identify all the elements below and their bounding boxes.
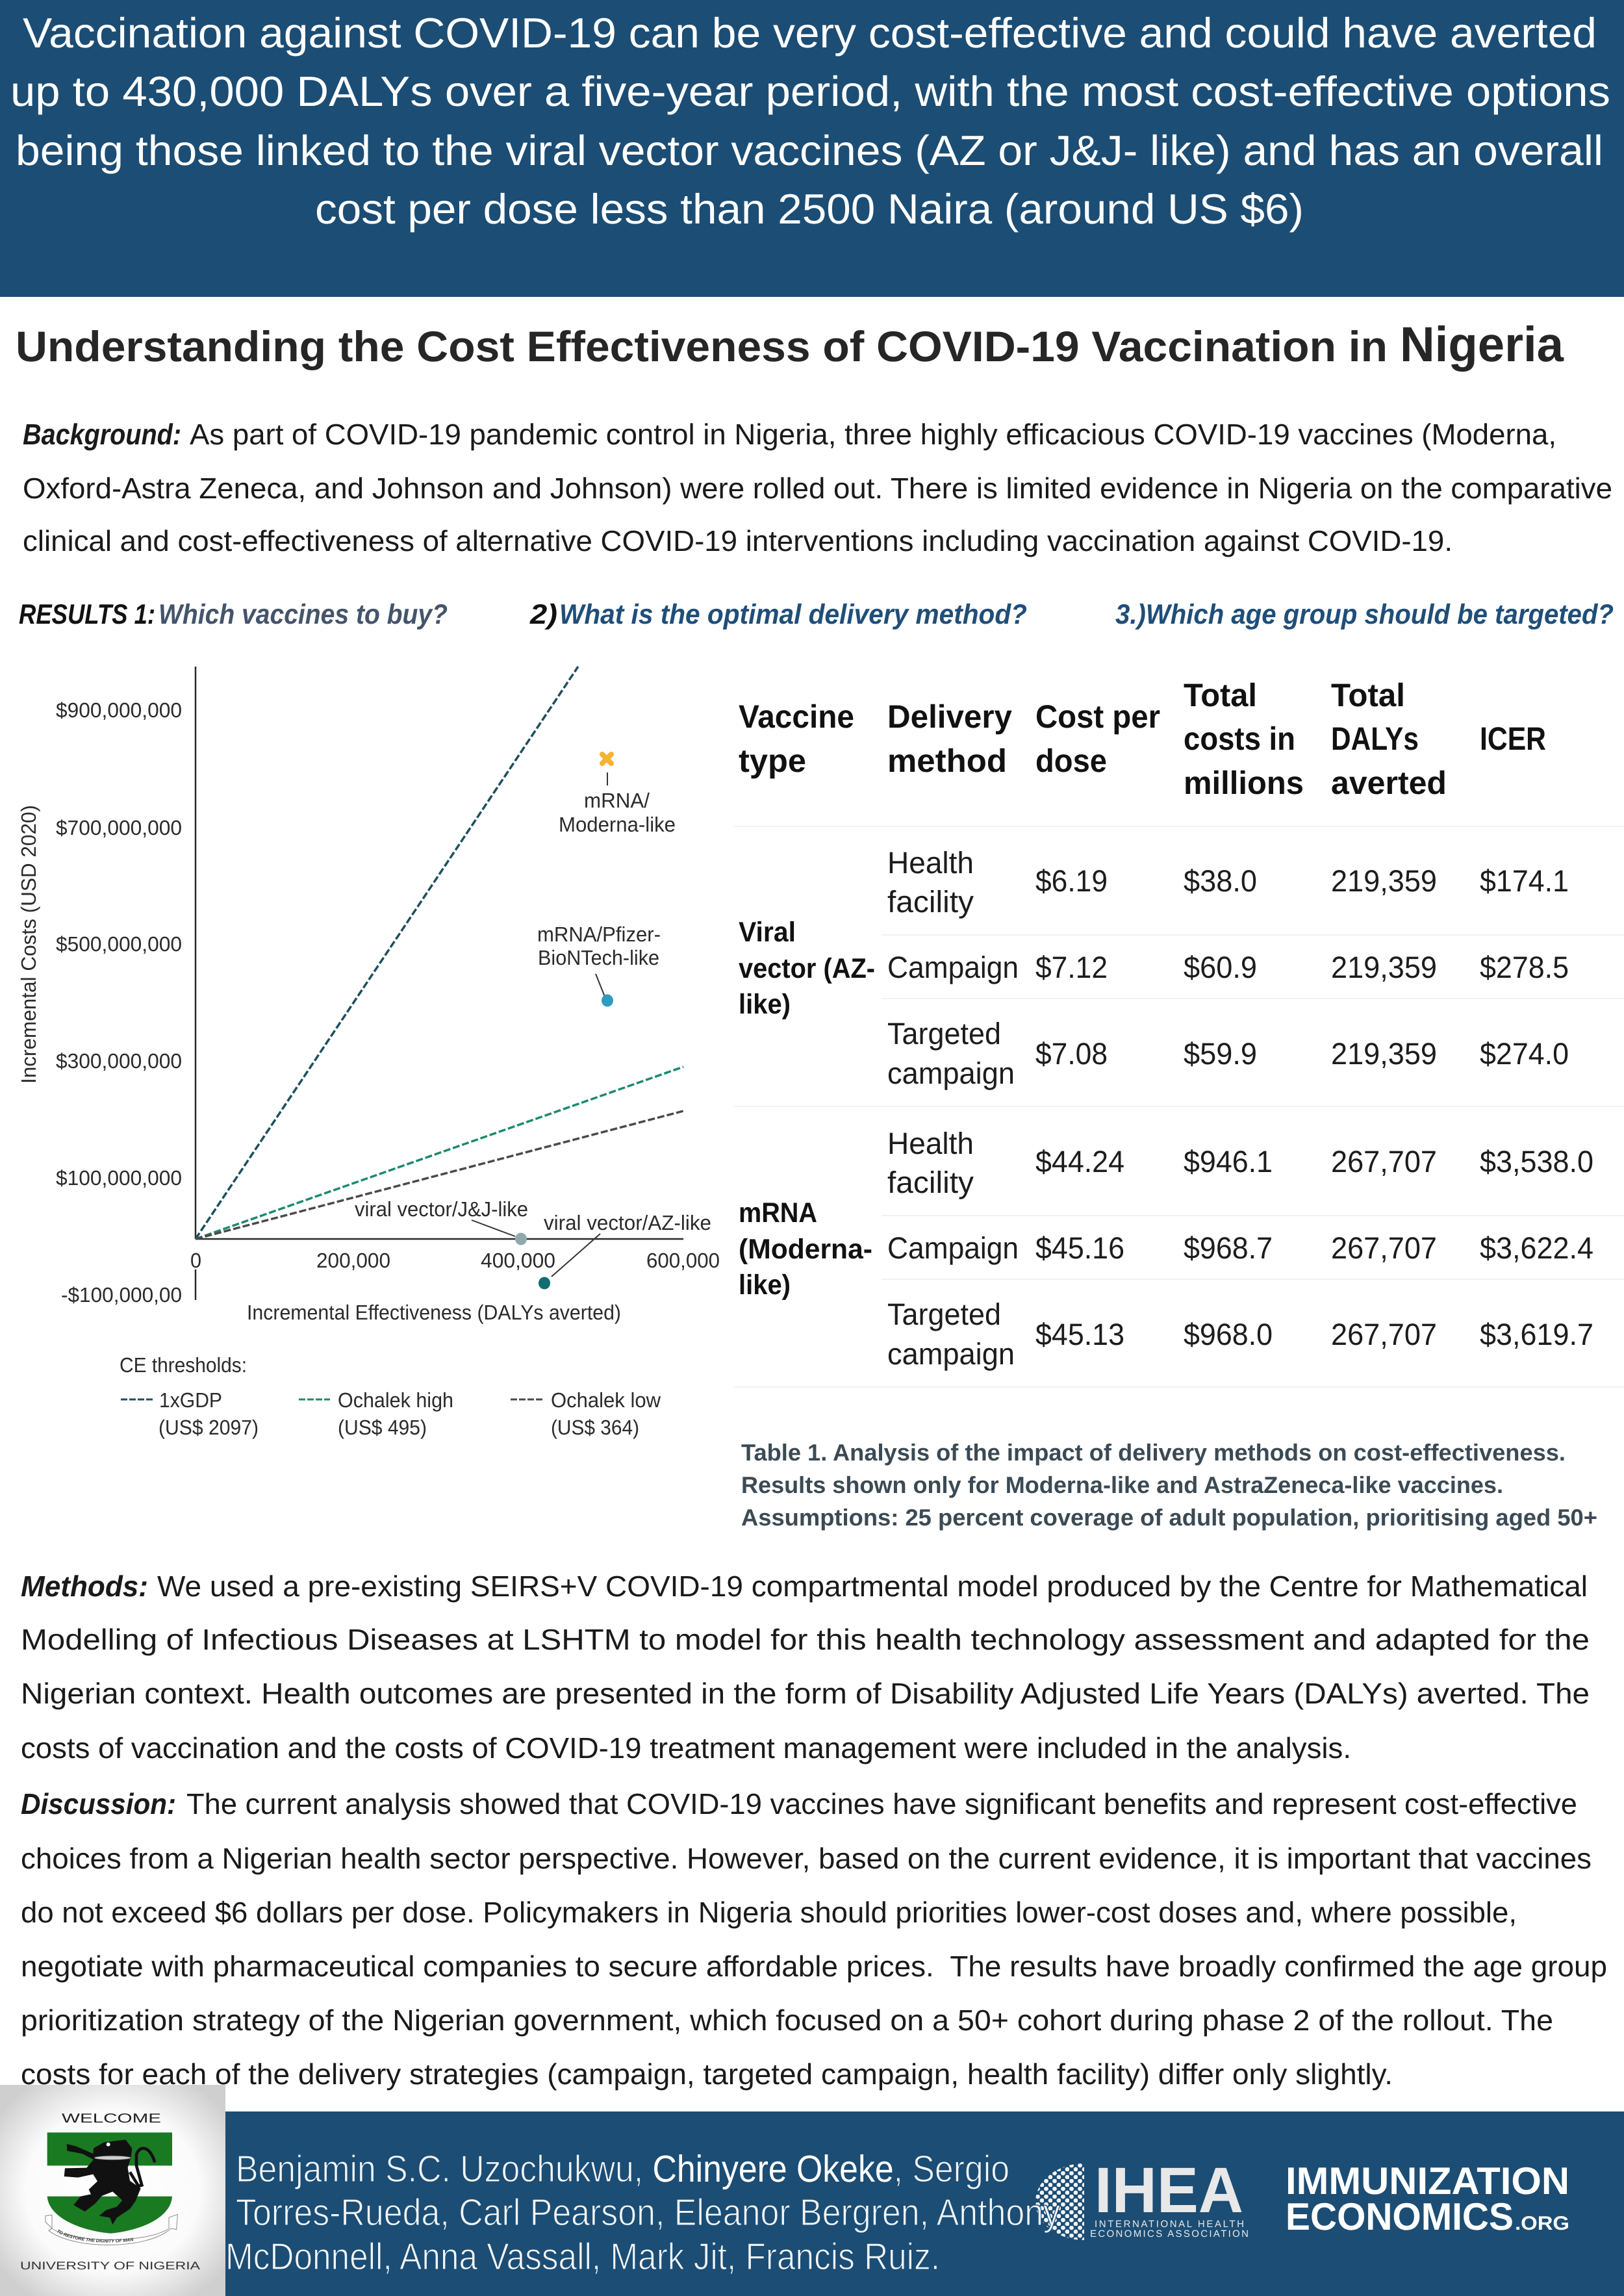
row: mRNA, health facility: 267,707 [1331,1144,1437,1179]
table header row: DALYs [1331,721,1419,757]
point: viral vector/AZ-like [539,1211,711,1289]
row: viral vector, targeted campaign: campaign [887,1056,1015,1090]
point: mRNA/Moderna-like: Moderna-like [559,813,676,836]
methods text block [21,1570,1590,1765]
point: mRNA/Pfizer-BioNTech-like: mRNA/Pfizer- [537,923,661,946]
table header row: type [739,743,806,779]
y axis tick labels: $300,000,000 [56,1049,182,1073]
point: mRNA/Moderna-like: mRNA/ [584,789,650,812]
row: viral vector, health facility: facility [887,884,974,919]
header banner: key message: Vaccination against COVID-19 can be very cost-effective and could have averted [23,9,1597,57]
row: viral vector, targeted campaign: 219,359 [1331,1036,1437,1071]
row: viral vector, campaign: $278.5 [1480,950,1569,984]
row: mRNA, campaign: $968.7 [1184,1231,1273,1265]
point: mRNA/Pfizer-BioNTech-like: BioNTech-like [538,946,659,969]
row: viral vector, health facility: $6.19 [1035,863,1108,898]
discussion text block [21,1787,1607,2091]
table caption [741,1439,1597,1531]
authors [225,2148,1060,2278]
icon: IHEA logo: INTERNATIONAL HEALTH [1095,2219,1244,2230]
legend: CE thresholds: (US$ 364) [551,1416,639,1439]
table header row: Delivery [887,698,1012,735]
row: mRNA, health facility: $946.1 [1184,1144,1273,1179]
row: viral vector, targeted campaign: $59.9 [1184,1036,1257,1071]
table caption: Table 1. Analysis of the impact of delivery methods on cost-effectiveness. [741,1439,1566,1466]
background text block: clinical and cost-effectiveness of alternative COVID-19 interventions including vaccination against COVID-19. [23,524,1453,557]
table header row: Total [1184,677,1257,713]
y axis tick labels: $100,000,000 [56,1166,182,1190]
row: mRNA, targeted campaign: $45.13 [1035,1317,1124,1351]
vaccine type: mRNA: (Moderna- [739,1234,872,1265]
methods text block: costs of vaccination and the costs of COVID-19 treatment management were included in the analysis. [21,1731,1351,1765]
legend: CE thresholds: Ochalek low [551,1388,661,1412]
vaccine type: viral vector: like) [739,989,791,1020]
legend: CE thresholds [120,1353,661,1439]
x axis tick labels: 400,000 [481,1249,555,1272]
methods text block: Nigerian context. Health outcomes are presented in the form of Disability Adjusted Life Years (DALYs) averted. The [21,1677,1590,1710]
table header row: Cost per [1035,698,1160,735]
x axis tick labels: 0 [190,1249,201,1272]
table header row: ICER [1480,721,1546,757]
row: mRNA, targeted campaign: campaign [887,1336,1015,1371]
point: viral vector/AZ-like: viral vector/AZ-like [544,1211,711,1234]
y axis [195,667,196,1300]
icon: immunizationeconomics.org logo: IMMUNIZATION [1286,2160,1569,2202]
discussion text block: costs for each of the delivery strategies (campaign, targeted campaign, health facility) differ only slightly. [21,2058,1393,2091]
icon: immunizationeconomics.org logo: .ORG [1515,2213,1569,2234]
row: mRNA, campaign: $3,622.4 [1480,1231,1593,1265]
authors: Torres-Rueda, Carl Pearson, Eleanor Bergren, Anthony [236,2191,1060,2234]
icon: IHEA logo: IHEA [1095,2154,1243,2226]
table caption: Results shown only for Moderna-like and AstraZeneca-like vaccines. [741,1472,1503,1498]
results headings: 2) [529,599,557,630]
legend: CE thresholds: (US$ 495) [338,1416,427,1439]
background text block: As part of COVID-19 pandemic control in Nigeria, three highly efficacious COVID-19 vaccines (Moderna, [190,418,1556,451]
row: viral vector, health facility [887,845,1569,919]
row: viral vector, health facility: 219,359 [1331,863,1437,898]
row: viral vector, campaign: $60.9 [1184,950,1257,984]
legend: CE thresholds: (US$ 2097) [159,1416,259,1439]
row: viral vector, campaign: $7.12 [1035,950,1108,984]
table header row: averted [1331,765,1447,801]
black lion [64,2139,155,2225]
y axis title: Incremental Costs (USD 2020) [17,805,40,1084]
row: viral vector, health facility: $38.0 [1184,863,1257,898]
x axis tick labels [190,1249,720,1272]
icon: University of Nigeria crest: WELCOME [62,2111,161,2126]
row: viral vector, targeted campaign: $7.08 [1035,1036,1108,1071]
point: mRNA/Pfizer-BioNTech-like [537,923,661,1007]
vaccine type: viral vector: vector (AZ- [739,953,875,984]
row: viral vector, campaign [887,950,1569,984]
table header row: Vaccine [739,698,854,735]
table rules [735,826,1624,1387]
y axis tick labels [56,698,182,1307]
row: mRNA, targeted campaign: Targeted [887,1297,1001,1331]
row: viral vector, targeted campaign [887,1016,1569,1090]
row: mRNA, campaign: 267,707 [1331,1231,1437,1265]
legend: CE thresholds: CE thresholds: [120,1353,247,1377]
row: mRNA, campaign: $45.16 [1035,1231,1124,1265]
methods text block: We used a pre-existing SEIRS+V COVID-19 compartmental model produced by the Centre for Mathematical [157,1570,1588,1603]
background text block: Oxford-Astra Zeneca, and Johnson and Johnson) were rolled out. There is limited evidence in Nigeria on the comparative [23,472,1612,505]
title: Nigeria [1400,317,1564,372]
x axis [196,1238,683,1240]
x axis title: Incremental Effectiveness (DALYs averted) [247,1301,621,1324]
table header row: Total [1331,677,1405,713]
row: mRNA, targeted campaign: $968.0 [1184,1317,1273,1351]
authors: McDonnell, Anna Vassall, Mark Jit, Francis Ruiz. [225,2236,940,2278]
y axis tick labels: $500,000,000 [56,932,182,956]
threshold line: Ochalek low [196,1111,683,1239]
threshold line: 1xGDP [196,667,578,1239]
row: mRNA, targeted campaign: 267,707 [1331,1317,1437,1351]
row: mRNA, targeted campaign: $3,619.7 [1480,1317,1593,1351]
discussion text block: negotiate with pharmaceutical companies to secure affordable prices. The results have broadly confirmed the age group [21,1950,1607,1983]
results headings: RESULTS 1: [19,599,155,630]
authors: Benjamin S.C. Uzochukwu, Chinyere Okeke, Sergio [236,2148,1009,2190]
icon: University of Nigeria crest: UNIVERSITY OF NIGERIA [20,2260,201,2272]
header banner: key message: up to 430,000 DALYs over a five-year period, with the most cost-effective options [10,68,1610,115]
icon: immunizationeconomics.org logo: ECONOMICS [1286,2195,1514,2238]
row: viral vector, health facility: Health [887,845,974,880]
scroll with motto [45,2214,178,2245]
x axis tick labels: 200,000 [316,1249,390,1272]
row: mRNA, health facility [887,1126,1593,1199]
title: Understanding the Cost Effectiveness of COVID-19 Vaccination in [16,322,1388,370]
icon: halftone globe [1035,2163,1084,2240]
icon: immunizationeconomics.org logo [1286,2160,1569,2238]
x axis tick labels: 600,000 [646,1249,720,1272]
header banner: key message [0,0,1624,297]
discussion text block: choices from a Nigerian health sector perspective. However, based on the current evidence, it is important that vaccines [21,1842,1592,1875]
point: viral vector/J&J-like [355,1197,528,1245]
vaccine type: mRNA [739,1197,872,1301]
y axis tick labels: $700,000,000 [56,816,182,839]
discussion text block: do not exceed $6 dollars per dose. Policymakers in Nigeria should priorities lower-cost doses and, where possible, [21,1896,1517,1929]
scroll with motto: TO RESTORE THE DIGNITY OF MAN [57,2230,133,2243]
row: viral vector, campaign: 219,359 [1331,950,1437,984]
vaccine type: viral vector: Viral [739,917,796,948]
row: viral vector, health facility: $174.1 [1480,863,1569,898]
row: mRNA, health facility: Health [887,1126,974,1160]
vaccine type: viral vector [739,917,875,1020]
row: mRNA, health facility: $3,538.0 [1480,1144,1593,1179]
results headings: Which vaccines to buy? [159,599,448,630]
table caption: Assumptions: 25 percent coverage of adult population, prioritising aged 50+ [741,1504,1597,1531]
table header row [739,677,1546,801]
header banner: key message: cost per dose less than 2500 Naira (around US $6) [315,185,1304,233]
vaccine type: mRNA: like) [739,1269,791,1301]
discussion text block: The current analysis showed that COVID-19 vaccines have significant benefits and represent cost-effective [186,1787,1577,1820]
table header row: millions [1184,765,1304,801]
table header row: dose [1035,743,1107,779]
vaccine type: mRNA: mRNA [739,1197,817,1229]
methods text block: Modelling of Infectious Diseases at LSHTM to model for this health technology assessment and adapted for the [21,1623,1590,1656]
y axis tick labels: -$100,000,00 [61,1283,182,1307]
row: mRNA, campaign [887,1231,1593,1265]
point: viral vector/J&J-like: viral vector/J&J-like [355,1197,528,1221]
icon: IHEA logo: ECONOMICS ASSOCIATION [1090,2228,1249,2239]
threshold line: Ochalek high [196,1067,683,1239]
table header row: costs in [1184,721,1295,757]
legend: CE thresholds: Ochalek high [338,1388,453,1412]
table header row: method [887,743,1007,779]
point: mRNA/Moderna-like [559,754,676,836]
background text block [23,418,1612,557]
row: viral vector, targeted campaign: Targeted [887,1016,1001,1051]
icon: University of Nigeria crest [0,2085,225,2296]
row: mRNA, campaign: Campaign [887,1231,1019,1265]
y axis tick labels: $900,000,000 [56,698,182,722]
shield: green bands [47,2132,172,2234]
row: viral vector, campaign: Campaign [887,950,1019,984]
chart: cost-effectiveness plane [17,667,720,1439]
footer band [225,2111,1624,2296]
row: mRNA, targeted campaign [887,1297,1593,1371]
results headings: What is the optimal delivery method? [559,599,1027,630]
row: mRNA, health facility: facility [887,1165,974,1199]
row: mRNA, health facility: $44.24 [1035,1144,1124,1179]
discussion text block: prioritization strategy of the Nigerian government, which focused on a 50+ cohort during phase 2 of the rollout. The [21,2004,1553,2037]
icon: IHEA logo [1035,2154,1249,2240]
background text block: Background: [23,418,181,451]
legend: CE thresholds: 1xGDP [159,1388,222,1412]
table: delivery methods [735,677,1624,1387]
discussion text block: Discussion: [21,1787,176,1820]
row: viral vector, targeted campaign: $274.0 [1480,1036,1569,1071]
header banner: key message: being those linked to the viral vector vaccines (AZ or J&J- like) and has an overall [16,127,1603,174]
results headings [19,599,1614,630]
methods text block: Methods: [21,1570,148,1603]
